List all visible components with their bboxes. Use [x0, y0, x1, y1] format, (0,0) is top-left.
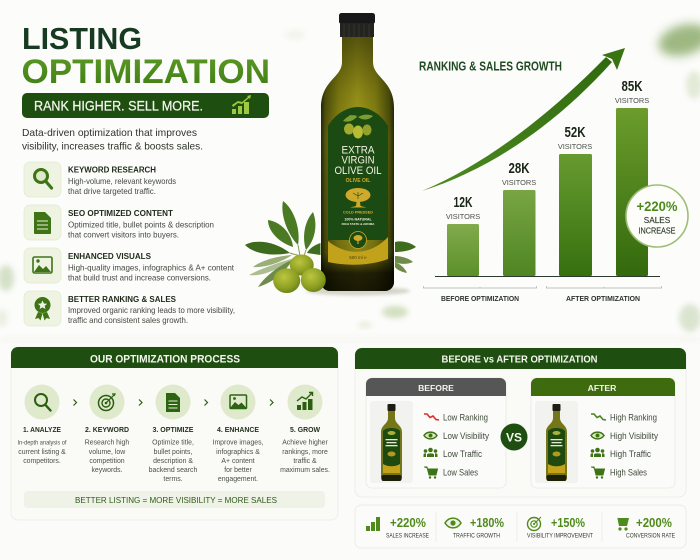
brackets — [424, 286, 662, 288]
bottle label: EXTRA — [342, 144, 375, 156]
step 5 grow: traffic & — [293, 458, 317, 465]
label seal — [350, 232, 366, 248]
bottle label — [328, 107, 388, 265]
process header: OUR OPTIMIZATION PROCESS — [90, 354, 240, 366]
intro text — [22, 128, 203, 152]
panel: stats — [355, 505, 686, 548]
intro text: Data-driven optimization that improves — [22, 128, 197, 139]
chart: ranking and sales growth — [419, 48, 688, 303]
axis labels — [441, 294, 640, 303]
arrow — [139, 400, 142, 406]
mini bottle — [546, 404, 567, 481]
tagline banner: RANK HIGHER. SELL MORE. — [34, 98, 203, 114]
arrow — [74, 400, 76, 406]
bar labels: 12K — [454, 195, 473, 211]
stat traffic growth — [445, 516, 504, 540]
high visibility: High Visibility — [610, 431, 659, 441]
stat traffic growth: +180% — [470, 516, 504, 530]
label olives — [343, 115, 373, 138]
high visibility — [591, 431, 659, 441]
feature: better ranking: traffic and consistent sales growth. — [68, 315, 188, 325]
low traffic: Low Traffic — [443, 449, 483, 459]
step 3 optimize — [149, 384, 197, 483]
step 2 keyword: volume, low — [89, 449, 125, 456]
step 2 keyword: competition — [89, 458, 125, 465]
step 2 keyword — [85, 384, 129, 474]
comparison header: BEFORE vs AFTER OPTIMIZATION — [442, 354, 598, 366]
feature: enhanced visuals: ENHANCED VISUALS — [68, 251, 151, 261]
before card: BEFORE — [418, 383, 454, 393]
feature: better ranking — [24, 291, 235, 326]
step 3 optimize: 3. OPTIMIZE — [152, 425, 194, 434]
olive branch left and right — [245, 201, 416, 287]
process header — [11, 347, 338, 368]
panel: before vs after — [355, 348, 686, 497]
bottle label: OLIVE OIL — [334, 165, 382, 177]
arrow — [204, 400, 208, 406]
icon: picture — [24, 248, 61, 283]
feature: keyword research: KEYWORD RESEARCH — [68, 164, 156, 174]
slogan strip: BETTER LISTING = MORE VISIBILITY = MORE SALES — [75, 495, 277, 505]
low ranking: Low Ranking — [443, 412, 488, 422]
bar labels — [446, 79, 649, 221]
bar labels: 28K — [508, 161, 530, 177]
feature: better ranking: Improved organic ranking leads to more visibility, — [68, 305, 235, 315]
step 1 analyze — [18, 384, 67, 465]
bar labels: VISITORS — [446, 212, 480, 221]
stat conversion rate — [614, 516, 675, 540]
step 5 grow: maximum sales. — [280, 467, 330, 474]
step 3 optimize: bullet points, — [154, 449, 192, 456]
feature: seo content: SEO OPTIMIZED CONTENT — [68, 208, 174, 218]
tagline banner — [22, 93, 269, 118]
title — [22, 22, 270, 91]
step 4 enhance — [213, 384, 264, 483]
step 5 grow — [280, 384, 330, 474]
step 2 keyword: keywords. — [91, 467, 123, 474]
bars — [447, 108, 648, 276]
callout: +220% sales increase: +220% — [636, 198, 678, 214]
title: LISTING — [22, 22, 142, 56]
step 4 enhance: infographics & — [216, 449, 260, 456]
comparison header — [355, 348, 686, 369]
olive oil bottle — [306, 13, 410, 296]
step 3 optimize: Optimize title, — [152, 440, 194, 446]
bar labels: 85K — [622, 79, 643, 95]
title: OPTIMIZATION — [22, 53, 270, 91]
bar labels: VISITORS — [502, 178, 536, 187]
step 1 analyze: In-depth analysis of — [18, 440, 67, 446]
axis labels: AFTER OPTIMIZATION — [566, 294, 640, 303]
callout: +220% sales increase — [626, 185, 688, 247]
icon: document — [24, 205, 61, 240]
stat conversion rate: +200% — [636, 516, 672, 530]
callout: +220% sales increase: SALES — [644, 216, 671, 225]
bottle label: OLIVE OIL — [346, 178, 370, 184]
olives — [273, 254, 326, 293]
step 4 enhance: for better — [224, 467, 252, 474]
feature: keyword research: High-volume, relevant keywords — [68, 176, 176, 186]
step 4 enhance: 4. ENHANCE — [217, 425, 259, 434]
high ranking: High Ranking — [610, 412, 657, 422]
step 4 enhance: A+ content — [221, 458, 255, 465]
step 1 analyze: 1. ANALYZE — [23, 425, 61, 434]
step 5 grow: 5. GROW — [290, 425, 321, 434]
feature: seo content: Optimized title, bullet points & description — [68, 220, 214, 230]
stat sales increase — [366, 516, 429, 540]
feature: enhanced visuals: that build trust and increase conversions. — [68, 272, 211, 282]
feature: keyword research — [24, 162, 176, 197]
bottle label: VIRGIN — [342, 154, 375, 166]
vs badge — [500, 424, 528, 450]
stat visibility improvement: +150% — [551, 516, 585, 530]
bottle label: COLD PRESSED — [343, 210, 373, 214]
feature: enhanced visuals: High-quality images, infographics & A+ content — [68, 262, 235, 272]
label tree — [346, 188, 370, 208]
axis labels: BEFORE OPTIMIZATION — [441, 294, 519, 303]
feature: better ranking: BETTER RANKING & SALES — [68, 294, 176, 304]
stat conversion rate: CONVERSION RATE — [626, 534, 675, 540]
bottle cap — [339, 13, 375, 37]
stat sales increase: SALES INCREASE — [386, 534, 429, 540]
high ranking — [591, 412, 657, 422]
before card — [366, 378, 506, 488]
step 5 grow: Achieve higher — [282, 440, 328, 446]
bottle label: 100% NATURAL — [344, 218, 372, 222]
growth arrow — [422, 48, 625, 191]
vs badge: VS — [506, 430, 522, 444]
step 1 analyze: current listing & — [18, 449, 66, 456]
step 2 keyword: Research high — [85, 440, 129, 446]
step 2 keyword: 2. KEYWORD — [85, 425, 129, 434]
icon: magnifier — [24, 162, 61, 197]
step 4 enhance: engagement. — [218, 476, 258, 483]
feature: seo content — [24, 205, 214, 240]
callout: +220% sales increase: INCREASE — [638, 226, 676, 236]
bottle label: RICH TASTE & AROMA — [342, 222, 375, 226]
intro text: visibility, increases traffic & boosts sales. — [22, 142, 203, 152]
step 1 analyze: competitors. — [23, 458, 61, 465]
high sales: High Sales — [610, 468, 648, 478]
feature: seo content: that convert visitors into buyers. — [68, 230, 179, 240]
feature: keyword research: that drive targeted traffic. — [68, 186, 156, 196]
step 3 optimize: terms. — [163, 476, 183, 483]
bar labels: VISITORS — [558, 142, 592, 151]
chart title: RANKING & SALES GROWTH — [419, 58, 562, 74]
low sales: Low Sales — [443, 468, 479, 478]
icon: award ribbon — [24, 291, 61, 326]
bar labels: 52K — [564, 125, 586, 141]
after card — [531, 378, 675, 488]
step 3 optimize: backend search — [149, 467, 197, 474]
high traffic — [590, 448, 652, 459]
panel: optimization process — [11, 347, 338, 520]
bottle glass — [321, 36, 394, 291]
after card: AFTER — [588, 383, 617, 393]
high sales — [591, 467, 648, 479]
low visibility: Low Visibility — [443, 431, 490, 441]
stat sales increase: +220% — [390, 516, 426, 530]
step 5 grow: rankings, more — [282, 449, 328, 456]
stat visibility improvement — [527, 516, 593, 540]
high traffic: High Traffic — [610, 449, 652, 459]
icon: growth bars — [232, 95, 251, 114]
step 3 optimize: description & — [153, 458, 193, 465]
step 4 enhance: Improve images, — [213, 440, 264, 446]
arrow — [270, 400, 273, 406]
feature: enhanced visuals — [24, 248, 235, 283]
stat visibility improvement: VISIBILITY IMPROVEMENT — [527, 534, 593, 540]
slogan strip — [24, 491, 325, 508]
mini bottle — [381, 404, 402, 481]
stat traffic growth: TRAFFIC GROWTH — [453, 534, 500, 540]
bottle label: 500 ml ℮ — [349, 255, 367, 260]
bar labels: VISITORS — [615, 96, 649, 105]
